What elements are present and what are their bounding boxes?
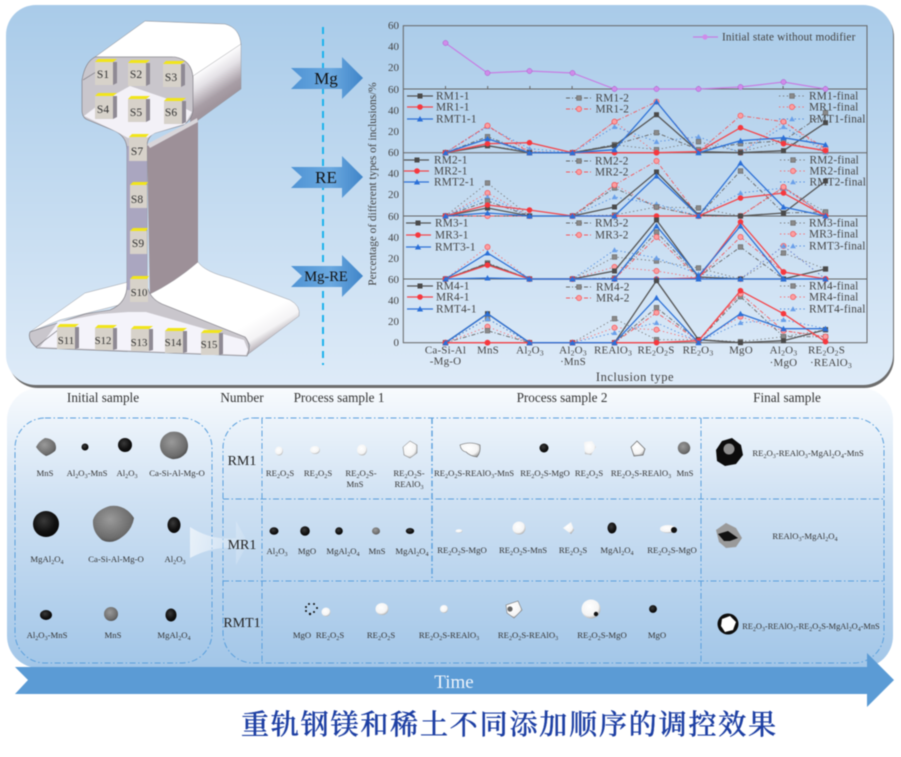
sample S2 xyxy=(128,60,150,86)
legend: RM4 group: MR4-2 xyxy=(596,292,630,304)
row labels xyxy=(223,454,261,631)
final particle RMT1 xyxy=(718,614,738,634)
sample S15: S15 xyxy=(201,339,217,351)
sample S6: S6 xyxy=(165,107,177,119)
sample S12: S12 xyxy=(95,335,111,347)
panel 2: RM1 MR1 RMT1 series xyxy=(446,102,826,153)
particle: Ca-Si-Al-Mg-O large xyxy=(93,506,134,542)
legend: RM2 group: RM2-final xyxy=(810,154,859,166)
row MR1 labels: MnS xyxy=(369,546,386,556)
x axis category labels: Ca-Si-Al xyxy=(425,344,466,356)
y axis ticks: 60 xyxy=(388,147,400,159)
final sample inclusions xyxy=(716,438,880,634)
y axis ticks: 20 xyxy=(388,126,400,138)
labels: MnS xyxy=(105,630,122,640)
frame: initial sample xyxy=(15,418,212,663)
y axis ticks: 20 xyxy=(388,62,400,74)
labels xyxy=(27,468,205,642)
legend: RM4 group: RM4-2 xyxy=(596,282,630,294)
row RMT1 labels: MgO xyxy=(648,630,666,640)
sample S9: S9 xyxy=(132,238,144,250)
row labels: RMT1 xyxy=(223,616,261,631)
final label MR1: REAlO3-MgAl2O4 xyxy=(772,531,838,543)
row RMT1 labels: RE2O2S xyxy=(316,630,344,642)
sample S10: S10 xyxy=(131,287,147,299)
sample S9 xyxy=(130,228,148,254)
x axis category labels: Al2O3 xyxy=(516,344,544,357)
legend: RM3 group: RM3-1 xyxy=(435,218,469,230)
x axis category labels: -Mg-O xyxy=(430,356,461,368)
column headings: Final sample xyxy=(753,390,821,405)
particle: Al2O3 xyxy=(118,438,132,452)
row RM1 labels: RE2O2S xyxy=(575,468,603,480)
final particle RM1 xyxy=(716,438,743,466)
y axis ticks: 0 xyxy=(394,337,400,349)
y axis title: Percentage of different types of inclusions/% xyxy=(367,82,379,286)
y axis ticks: 20 xyxy=(388,189,400,201)
x axis category labels: RE2O2S xyxy=(637,344,675,357)
x axis category labels: MgO xyxy=(729,344,753,356)
initial sample inclusions xyxy=(27,432,205,642)
sample S12 xyxy=(95,325,117,350)
row MR1 labels: RE2O2S-MnS xyxy=(499,545,547,557)
y axis ticks: 60 xyxy=(388,20,400,32)
sample S14: S14 xyxy=(165,337,182,349)
x axis title: Inclusion type xyxy=(596,370,674,384)
row MR1 labels: MgAl2O4 xyxy=(326,546,360,558)
row RMT1 labels: RE2O2S-REAlO3 xyxy=(419,630,479,642)
row MR1 labels: MgAl2O4 xyxy=(395,546,429,558)
arrow: RE: RE xyxy=(315,168,337,187)
arrow: time xyxy=(15,653,894,707)
row RM1 labels: RE2O2S xyxy=(266,468,294,480)
row RMT1 labels xyxy=(419,630,666,642)
arrow: time: Time xyxy=(434,672,474,693)
sample S13 xyxy=(131,326,153,351)
labels: MgAl2O4 xyxy=(30,554,64,566)
legend: RM1 group: MR1-1 xyxy=(436,102,470,114)
legend: RM1 group xyxy=(407,90,866,126)
x axis category labels: MnS xyxy=(477,344,499,356)
x axis category labels: REAlO3 xyxy=(594,344,632,357)
sample S4 xyxy=(95,93,117,119)
y axis ticks: 40 xyxy=(388,105,400,117)
legend: RM3 group: RM3-2 xyxy=(595,218,629,230)
particle: MgAl2O4 xyxy=(33,511,59,537)
sample S1: S1 xyxy=(97,69,109,81)
particle: Al2O3 black xyxy=(168,517,180,533)
sample S10 xyxy=(130,276,149,302)
y axis ticks: 40 xyxy=(388,168,400,180)
row labels: RM1 xyxy=(228,454,256,469)
sample S2: S2 xyxy=(130,69,142,81)
row RM1 labels: RE2O2S xyxy=(304,468,332,480)
legend: RM1 group: RM1-2 xyxy=(596,92,629,104)
legend: RM2 group: MR2-final xyxy=(810,166,859,178)
x axis category labels: Al2O3 xyxy=(770,344,797,357)
row RM1 labels: RE2O2S- xyxy=(393,468,425,480)
x axis category labels: ·MgO xyxy=(770,357,797,369)
y axis ticks xyxy=(388,20,400,349)
legend: RM4 group: RMT4-1 xyxy=(436,304,477,316)
arrow: translucent transition xyxy=(190,521,248,565)
labels: MgAl2O4 xyxy=(157,630,191,642)
plot frames xyxy=(403,26,867,343)
arrow: Mg xyxy=(291,57,363,99)
row MR1 labels xyxy=(266,546,429,558)
legend: RM2 group: RM2-1 xyxy=(434,154,468,166)
y axis ticks: 60 xyxy=(388,84,400,96)
y axis ticks: 20 xyxy=(388,253,400,265)
legend: RM3 group: MR3-final xyxy=(809,228,858,240)
stacked line chart: inclusion percentages xyxy=(367,20,867,384)
arrow: Mg: Mg xyxy=(314,69,338,88)
row RMT1 particles xyxy=(440,600,657,618)
labels: MnS xyxy=(37,468,54,478)
legend: RM1 group: RM1-1 xyxy=(436,90,470,102)
x axis category labels: ·MnS xyxy=(560,356,586,368)
legend: RM4 group xyxy=(407,280,866,316)
final label RMT1: RE2O3-REAlO3-RE2O2S-MgAl2O4-MnS xyxy=(742,622,880,633)
particle: MnS round xyxy=(104,607,118,621)
labels: Al2O3 xyxy=(164,554,186,566)
y axis ticks: 60 xyxy=(388,211,400,223)
row RM1 labels xyxy=(434,468,694,480)
x axis category labels xyxy=(425,344,852,370)
row MR1 labels: Al2O3 xyxy=(266,546,288,558)
dashed separator xyxy=(322,27,324,365)
panel: rail and inclusion charts xyxy=(6,5,894,388)
sample S8 xyxy=(130,182,148,208)
arrow: RE xyxy=(291,156,363,198)
legend: RM3 group: RMT3-final xyxy=(809,240,866,252)
row RM1 particles xyxy=(460,441,690,457)
sample S8: S8 xyxy=(131,194,143,206)
legend: RM1 group: MR1-2 xyxy=(596,104,629,116)
x axis category labels: ·REAlO3 xyxy=(810,357,852,370)
legend: RM4 group: RMT4-final xyxy=(809,304,866,316)
row MR1 labels: RE2O2S xyxy=(559,545,587,557)
row RMT1 labels xyxy=(293,630,395,642)
row MR1 labels: RE2O2S-MgO xyxy=(647,545,697,557)
row RM1 labels: RE2O2S-REAlO3 xyxy=(611,468,671,480)
particle: MgAl2O4 round xyxy=(166,608,176,622)
x axis category labels: RE2O2S xyxy=(808,344,845,357)
row RMT1 labels: MgO xyxy=(293,630,311,640)
legend: RM2 group: RMT2-1 xyxy=(434,176,475,188)
column headings: Number xyxy=(220,390,264,405)
row RMT1 labels: RE2O2S-MgO xyxy=(577,630,627,642)
legend: RM3 group: RMT3-1 xyxy=(435,242,476,254)
sample S5 xyxy=(128,96,150,122)
frame: process table xyxy=(223,418,884,663)
legend: RM2 group: MR2-1 xyxy=(434,166,468,178)
legend: initial state: Initial state without modifier xyxy=(722,32,856,44)
y axis ticks: 40 xyxy=(388,295,400,307)
y axis ticks: 40 xyxy=(388,232,400,244)
legend: RM4 group: RM4-final xyxy=(809,280,858,292)
y axis ticks: 60 xyxy=(388,274,400,286)
sample S5: S5 xyxy=(130,107,142,119)
legend: RM3 group: RM3-final xyxy=(809,218,858,230)
row RM1 particles xyxy=(275,441,417,458)
y axis ticks: 20 xyxy=(388,316,400,328)
row RM1 labels: RE2O2S-REAlO3-MnS xyxy=(434,468,514,480)
legend: RM2 group: RMT2-final xyxy=(810,176,866,188)
row RM1 labels: MnS xyxy=(677,468,694,478)
legend: RM4 group: MR4-final xyxy=(809,292,858,304)
row RM1 labels xyxy=(266,468,425,491)
labels: Al2O3-MnS xyxy=(67,468,108,480)
final particle MR1 xyxy=(716,523,742,548)
column headings: Process sample 1 xyxy=(294,390,384,405)
y axis ticks: 40 xyxy=(388,41,400,53)
sample S11: S11 xyxy=(58,335,74,347)
arrow: Mg-RE xyxy=(291,255,363,297)
process sample 1 inclusions xyxy=(266,441,429,642)
sample S15 xyxy=(201,330,223,355)
panel: inclusion evolution xyxy=(7,388,893,668)
column headings xyxy=(67,390,821,405)
sample S13: S13 xyxy=(131,337,147,349)
particle: Al2O3-MnS xyxy=(82,444,88,450)
legend: RM4 group: RM4-1 xyxy=(436,280,470,292)
row RMT1 labels: RE2O2S-REAlO3 xyxy=(498,630,558,642)
sample S14 xyxy=(165,328,187,353)
row RMT1 labels: RE2O2S xyxy=(367,630,395,642)
legend: RM1 group: MR1-final xyxy=(809,102,858,114)
row MR1 labels: RE2O2S-MgO xyxy=(437,545,487,557)
particle: Ca-Si-Al-Mg-O small xyxy=(160,432,188,459)
arrow: Mg-RE: Mg-RE xyxy=(304,269,348,285)
sample S3 xyxy=(163,61,185,87)
particle: MnS xyxy=(36,438,56,456)
sample S3: S3 xyxy=(165,72,177,84)
legend: RM3 group: MR3-1 xyxy=(435,230,469,242)
sample S6 xyxy=(164,98,186,124)
legend: RM3 group: MR3-2 xyxy=(595,230,629,242)
legend: RM1 group: RMT1-1 xyxy=(436,114,477,126)
panel 4: RM3 MR3 RMT3 series xyxy=(446,220,826,279)
legend: RM4 group: MR4-1 xyxy=(436,292,470,304)
particle: Al2O3-MnS black xyxy=(40,610,52,620)
legend: RM1 group: RMT1-final xyxy=(809,114,866,126)
rail cross-section with sampling points xyxy=(29,21,299,356)
row RMT1 particles xyxy=(305,603,388,616)
legend: RM2 group: RM2-2 xyxy=(595,156,629,168)
x axis category labels: Al2O3 xyxy=(559,344,587,357)
legend: RM3 group xyxy=(406,218,866,254)
final label RM1: RE2O3-REAlO3-MgAl2O4-MnS xyxy=(752,448,864,460)
row RM1 labels: RE2O2S-MgO xyxy=(520,468,570,480)
panel 1: initial state series xyxy=(443,40,828,92)
row MR1 labels xyxy=(437,545,697,557)
row MR1 labels: MgO xyxy=(298,546,316,556)
row RM1 labels: RE2O2S- xyxy=(345,468,377,480)
row MR1 particles xyxy=(456,522,677,534)
panel 3: RM2 MR2 RMT2 series xyxy=(446,161,826,216)
column headings: Initial sample xyxy=(67,390,139,405)
labels: Ca-Si-Al-Mg-O xyxy=(149,468,205,478)
legend: RM1 group: RM1-final xyxy=(809,90,858,102)
labels: Al2O3-MnS xyxy=(27,630,68,642)
process sample 2 inclusions xyxy=(419,441,697,642)
sample S11 xyxy=(57,324,79,349)
legend: RM2 group: MR2-2 xyxy=(595,166,629,178)
sample S4: S4 xyxy=(97,104,109,116)
column headings: Process sample 2 xyxy=(517,390,607,405)
sample S7: S7 xyxy=(131,146,143,158)
labels: Ca-Si-Al-Mg-O xyxy=(88,554,144,564)
panel 5: RM4 MR4 RMT4 series xyxy=(446,281,826,343)
sample S7 xyxy=(129,134,149,161)
row MR1 particles xyxy=(270,526,414,536)
row RM1 labels: REAlO3 xyxy=(394,479,424,491)
labels: Al2O3 xyxy=(116,468,138,480)
title: 重轨钢镁和稀土不同添加顺序的调控效果 xyxy=(241,709,778,741)
row labels: MR1 xyxy=(228,538,256,553)
legend: RM2 group xyxy=(404,154,866,188)
row RM1 labels: MnS xyxy=(347,479,364,489)
sample S1 xyxy=(95,59,117,85)
row MR1 labels: MgAl2O4 xyxy=(600,545,634,557)
x axis category labels: RE2O3 xyxy=(683,344,713,357)
